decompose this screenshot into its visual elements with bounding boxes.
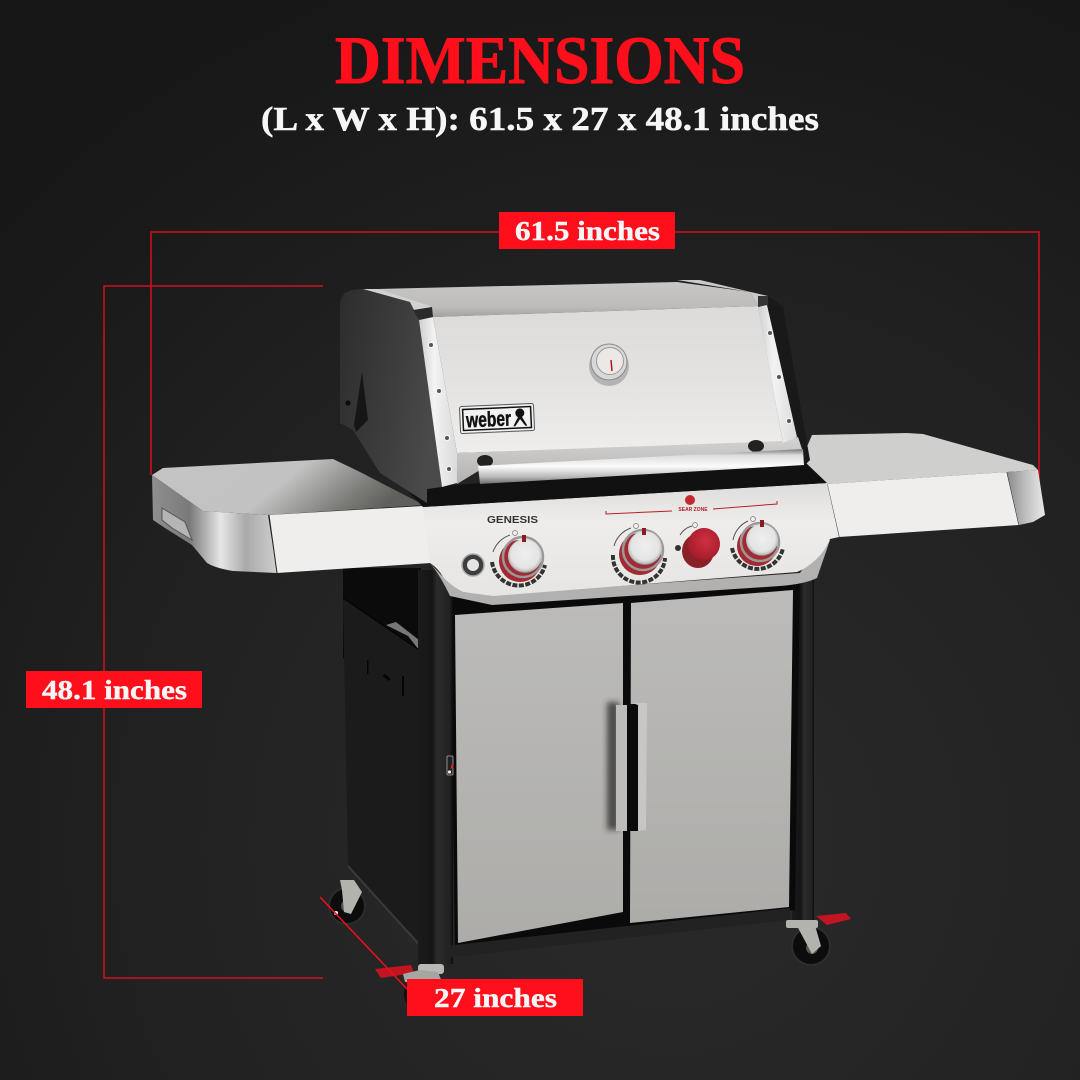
rivets bbox=[428, 330, 792, 472]
label: 61.5 inches bbox=[499, 212, 675, 249]
label: 27 inches: 27 inches bbox=[434, 983, 557, 1013]
red sear knob bbox=[675, 522, 720, 568]
shelf end bbox=[1007, 470, 1045, 525]
lid top band bbox=[378, 282, 758, 317]
label: 48.1 inches bbox=[26, 671, 202, 708]
handle mounts bbox=[477, 440, 764, 467]
door handle gap bbox=[627, 704, 638, 831]
front caster bbox=[375, 964, 444, 1012]
latch bbox=[447, 756, 454, 775]
top strip right bbox=[677, 280, 768, 306]
door handle shadow bbox=[607, 702, 619, 830]
dimension line: width bbox=[320, 897, 408, 990]
dimension line: height bbox=[104, 286, 323, 978]
subtitle: (L x W x H): 61.5 x 27 x 48.1 inches bbox=[261, 101, 819, 138]
shelf top bbox=[797, 433, 1038, 484]
label: 61.5 inches: 61.5 inches bbox=[515, 216, 660, 246]
weber badge bbox=[459, 403, 535, 434]
knob 1 bbox=[492, 530, 545, 586]
rear left caster bbox=[329, 880, 365, 924]
control panel bbox=[423, 483, 839, 605]
lid trim right bbox=[758, 305, 797, 443]
label: 48.1 inches: 48.1 inches bbox=[42, 675, 187, 705]
door handle right bbox=[632, 703, 647, 831]
shelf end bbox=[152, 475, 277, 573]
shelf brackets bbox=[162, 508, 192, 540]
knob 3 bbox=[732, 516, 783, 569]
lid body bbox=[363, 280, 803, 487]
top strip left bbox=[363, 289, 433, 320]
dimension line: length bbox=[151, 232, 1039, 482]
cart side panel bbox=[343, 568, 424, 950]
title: DIMENSIONS bbox=[335, 22, 745, 98]
thermometer bbox=[589, 344, 629, 386]
lid face bbox=[433, 306, 783, 453]
kettle icon bbox=[513, 408, 527, 426]
lid lower strip bbox=[457, 437, 803, 484]
right door bbox=[630, 590, 793, 923]
lid base band bbox=[405, 462, 827, 507]
shelf front bbox=[827, 472, 1019, 537]
door handle left bbox=[616, 705, 627, 831]
knob 2 bbox=[613, 524, 665, 583]
cabinet back bbox=[450, 578, 800, 956]
weber badge: weber bbox=[465, 407, 512, 432]
sear zone line: SEAR ZONE bbox=[678, 507, 708, 513]
right shelf bbox=[797, 433, 1045, 537]
left shelf bbox=[152, 459, 431, 573]
lid end cap right bbox=[758, 295, 810, 467]
shelf front bbox=[269, 506, 431, 573]
sear zone line bbox=[606, 495, 777, 514]
shelf top bbox=[152, 459, 424, 515]
left door bbox=[455, 603, 623, 943]
left front leg bbox=[418, 570, 453, 964]
lid end cap left bbox=[340, 289, 442, 503]
lid handle bbox=[478, 449, 804, 484]
lid trim left bbox=[419, 317, 457, 487]
grill bbox=[152, 280, 1045, 1012]
GENESIS label: GENESIS bbox=[487, 515, 538, 526]
bottom rail bbox=[445, 908, 790, 958]
label: 27 inches bbox=[407, 979, 583, 1016]
ignition button bbox=[462, 554, 484, 576]
right caster bbox=[786, 913, 851, 965]
right leg bbox=[792, 578, 814, 920]
